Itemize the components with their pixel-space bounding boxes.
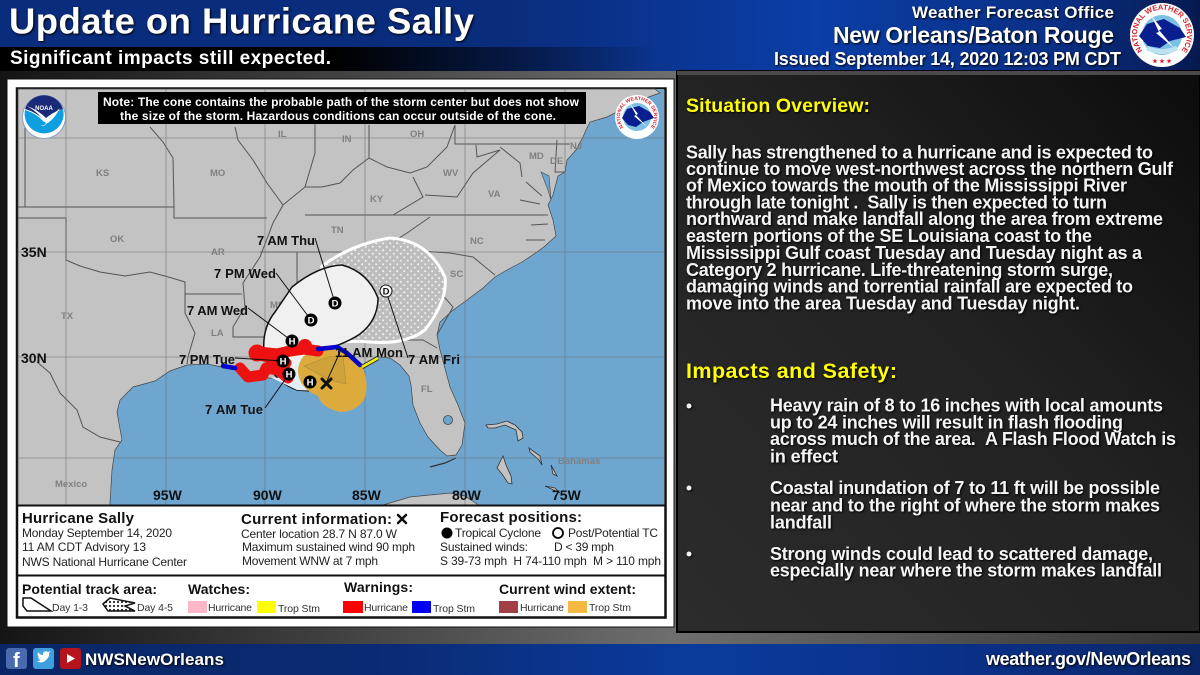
tropical storm watch coast (362, 358, 378, 367)
info panel divider lines (17, 506, 665, 576)
forecast point markers: H (280, 356, 287, 368)
cone note: the size of the storm. Hazardous conditions can occur outside of the cone. (120, 109, 556, 123)
tropical storm warning coast (223, 347, 360, 368)
grid labels: 95W (153, 487, 183, 503)
state labels: IL (278, 129, 287, 140)
state labels: NJ (570, 141, 582, 152)
heading: impacts and safety: Impacts and Safety: (686, 359, 897, 383)
state labels: MS (270, 300, 284, 311)
social handle: NWSNewOrleans (85, 650, 224, 669)
bullet: strong winds: Strong winds could lead to scattered damage, (770, 544, 1153, 564)
office name and issue time (774, 3, 1121, 69)
Chesapeake bay and inlets (541, 172, 551, 200)
grid labels: 75W (552, 487, 582, 503)
day 1-3 potential track area (264, 265, 378, 392)
icon: Facebook (6, 648, 27, 672)
hurricane warning coast (240, 349, 318, 378)
legend: watches: Trop Stm (278, 603, 320, 615)
bullet: heavy rain: up to 24 inches will result in flash flooding (770, 412, 1123, 432)
icon: NOAA logo: NOAA (35, 106, 53, 112)
heading: situation overview: Situation Overview: (686, 95, 870, 117)
panel: forecast positions: Tropical Cyclone (455, 526, 541, 540)
panel: storm identification: NWS National Hurricane Center (22, 555, 187, 569)
legend: potential track area (22, 581, 173, 614)
panel: current information: Maximum sustained wind 90 mph (242, 540, 415, 554)
grid labels: 35N (21, 244, 47, 260)
panel: forecast cone map card (8, 78, 674, 628)
legend: warnings: Hurricane (364, 602, 408, 614)
icon: YouTube (60, 648, 81, 669)
icon: National Weather Service seal: NATIONAL WEATHER SERVICE (1132, 4, 1192, 54)
panel: forecast positions: Sustained winds: (440, 540, 528, 554)
bullet: coastal inundation: landfall (770, 512, 832, 532)
panel: situation text (677, 71, 1200, 632)
situation overview text: continue to move west-northwest across the northern Gulf (686, 159, 1174, 179)
situation overview text: Mississippi Gulf coast Tuesday and Tuesday night as a (686, 243, 1143, 263)
state labels: LA (211, 328, 224, 339)
cone note: Note: The cone contains the probable path of the storm center but does not show (103, 95, 580, 109)
legend: current wind extent: Current wind extent: (499, 581, 636, 597)
icon: NWS logo: NATIONAL WEATHER SERVICE (616, 96, 658, 129)
situation overview text: of Mexico towards the mouth of the Mississippi River (686, 176, 1127, 196)
legend: watches (188, 581, 320, 615)
legend: current wind extent (499, 581, 636, 614)
situation overview text: Sally has strengthened to a hurricane and is expected to (686, 142, 1153, 162)
panel: current information (241, 511, 415, 568)
icon: Facebook: f (13, 650, 20, 672)
state labels: NC (470, 236, 484, 247)
state labels: TX (61, 311, 74, 322)
situation overview text: eastern portions of the SE Louisiana coast to the (686, 226, 1092, 246)
legend: warnings: Trop Stm (433, 603, 475, 615)
current position marker (322, 379, 331, 388)
panel: forecast positions: D < 39 mph (554, 540, 614, 554)
bullet: heavy rain: across much of the area. A Flash Flood Watch is (770, 429, 1176, 449)
panel: storm identification: 11 AM CDT Advisory 13 (22, 540, 146, 554)
grid labels: 30N (21, 350, 47, 366)
legend: potential track area: Day 4-5 (137, 602, 173, 614)
situation overview text (686, 142, 1174, 313)
bullet: strong winds: especially near where the storm makes landfall (770, 561, 1162, 581)
situation overview text: northward and make landfall along the area from extreme (686, 209, 1163, 229)
day 4-5 potential track area (320, 238, 445, 345)
forecast time labels: 7 AM Fri (408, 352, 460, 367)
coastal inlets (520, 182, 548, 240)
forecast time labels: 7 AM Wed (187, 303, 248, 318)
state labels: OH (410, 129, 424, 140)
forecast point markers: D (383, 286, 390, 298)
state labels: KY (370, 194, 384, 205)
state labels: WV (443, 168, 459, 179)
forecast time labels: 7 PM Tue (179, 352, 235, 367)
grid labels: 90W (253, 487, 283, 503)
situation overview text: move into the area Tuesday and Tuesday night. (686, 293, 1080, 313)
panel: storm identification (22, 510, 187, 569)
state labels: SC (450, 269, 463, 280)
bullet: strong winds (686, 544, 1162, 581)
forecast time labels: 7 PM Wed (214, 266, 276, 281)
situation overview text: damaging winds and torrential rainfall are expected to (686, 276, 1133, 296)
legend: potential track area: Potential track area: (22, 581, 157, 597)
bullet: coastal inundation: Coastal inundation of 7 to 11 ft will be possible (770, 478, 1160, 498)
office name and issue time: Issued September 14, 2020 12:03 PM CDT (774, 49, 1121, 69)
land mass (18, 89, 660, 505)
panel: current information: Movement WNW at 7 mph (242, 554, 378, 568)
state labels: Bahamas (558, 456, 600, 467)
forecast time labels: 11 AM Mon (335, 345, 403, 360)
forecast point markers: D (308, 316, 315, 326)
grid labels: 80W (452, 487, 482, 503)
grid labels: 85W (352, 487, 382, 503)
state labels: IN (342, 134, 352, 145)
grid labels (21, 244, 582, 503)
state labels: GA (400, 300, 414, 311)
forecast point markers (276, 285, 392, 388)
state borders (18, 115, 570, 442)
forecast time labels: 7 AM Thu (257, 233, 315, 248)
bullet: coastal inundation: near and to the right of where the storm makes (770, 495, 1160, 515)
icon: National Weather Service seal: ★ ★ ★ (1152, 58, 1172, 65)
forecast point markers: D (332, 298, 339, 310)
panel: forecast positions (440, 509, 661, 568)
bullet: heavy rain: in effect (770, 446, 838, 466)
state labels: DE (550, 156, 563, 167)
forecast time leader lines (235, 238, 408, 408)
state labels: MO (210, 168, 225, 179)
state labels: AL (319, 302, 332, 313)
bullet: heavy rain (686, 396, 1176, 466)
situation overview text: Category 2 hurricane. Life-threatening storm surge, (686, 260, 1113, 280)
forecast point markers: H (307, 378, 314, 388)
panel: storm identification: Monday September 14, 2020 (22, 526, 172, 540)
situation overview text: through late tonight . Sally is then expected to turn (686, 192, 1107, 212)
lat-lon grid (18, 89, 664, 505)
Cuba (383, 493, 477, 505)
legend: current wind extent: Trop Stm (589, 602, 631, 614)
forecast point markers: H (286, 370, 293, 380)
forecast time labels: 7 AM Tue (205, 402, 263, 417)
state labels: KS (96, 168, 109, 179)
state labels (55, 129, 600, 490)
legend: warnings: Warnings: (344, 579, 413, 595)
state labels: Mexico (55, 479, 87, 490)
forecast point markers: H (289, 336, 296, 348)
icon: NOAA logo (22, 95, 66, 138)
current tropical storm wind extent (298, 349, 367, 412)
legend: watches: Watches: (188, 581, 250, 597)
title: Update on Hurricane Sally (9, 0, 475, 42)
cone note (98, 92, 586, 124)
panel: forecast positions: Post/Potential TC (568, 526, 658, 540)
website: weather.gov/NewOrleans (985, 649, 1191, 669)
panel: current information: Current information: (241, 511, 392, 528)
bullet: coastal inundation (686, 478, 1160, 532)
state labels: OK (110, 234, 124, 245)
watch highlight (362, 358, 378, 367)
wind extent over land (304, 356, 346, 384)
legend: current wind extent: Hurricane (520, 602, 564, 614)
legend: potential track area: Day 1-3 (52, 602, 88, 614)
panel: forecast positions: S 39-73 mph H 74-110 mph M > 110 mph (440, 554, 661, 568)
state labels: VA (488, 189, 501, 200)
Florida Keys and lake (430, 458, 456, 467)
panel: current information: Center location 28.7 N 87.0 W (241, 527, 398, 541)
map (18, 88, 664, 504)
panel: storm identification: Hurricane Sally (22, 510, 135, 527)
forecast time labels (179, 233, 460, 417)
state labels: TN (331, 225, 344, 236)
state labels: MD (529, 151, 544, 162)
header banner (0, 0, 1200, 71)
office name and issue time: New Orleans/Baton Rouge (833, 22, 1114, 48)
state labels: FL (421, 384, 433, 395)
bullet: heavy rain: Heavy rain of 8 to 16 inches with local amounts (770, 396, 1163, 416)
legend: warnings (343, 579, 475, 615)
Bahamas (486, 421, 560, 493)
legend: watches: Hurricane (208, 602, 252, 614)
subtitle: Significant impacts still expected. (10, 48, 331, 69)
ocean (18, 89, 664, 505)
panel: forecast positions: Forecast positions: (440, 509, 582, 526)
icon: Twitter (33, 648, 54, 669)
office name and issue time: Weather Forecast Office (912, 3, 1114, 22)
footer bar (0, 644, 1200, 675)
state labels: AR (211, 247, 225, 258)
